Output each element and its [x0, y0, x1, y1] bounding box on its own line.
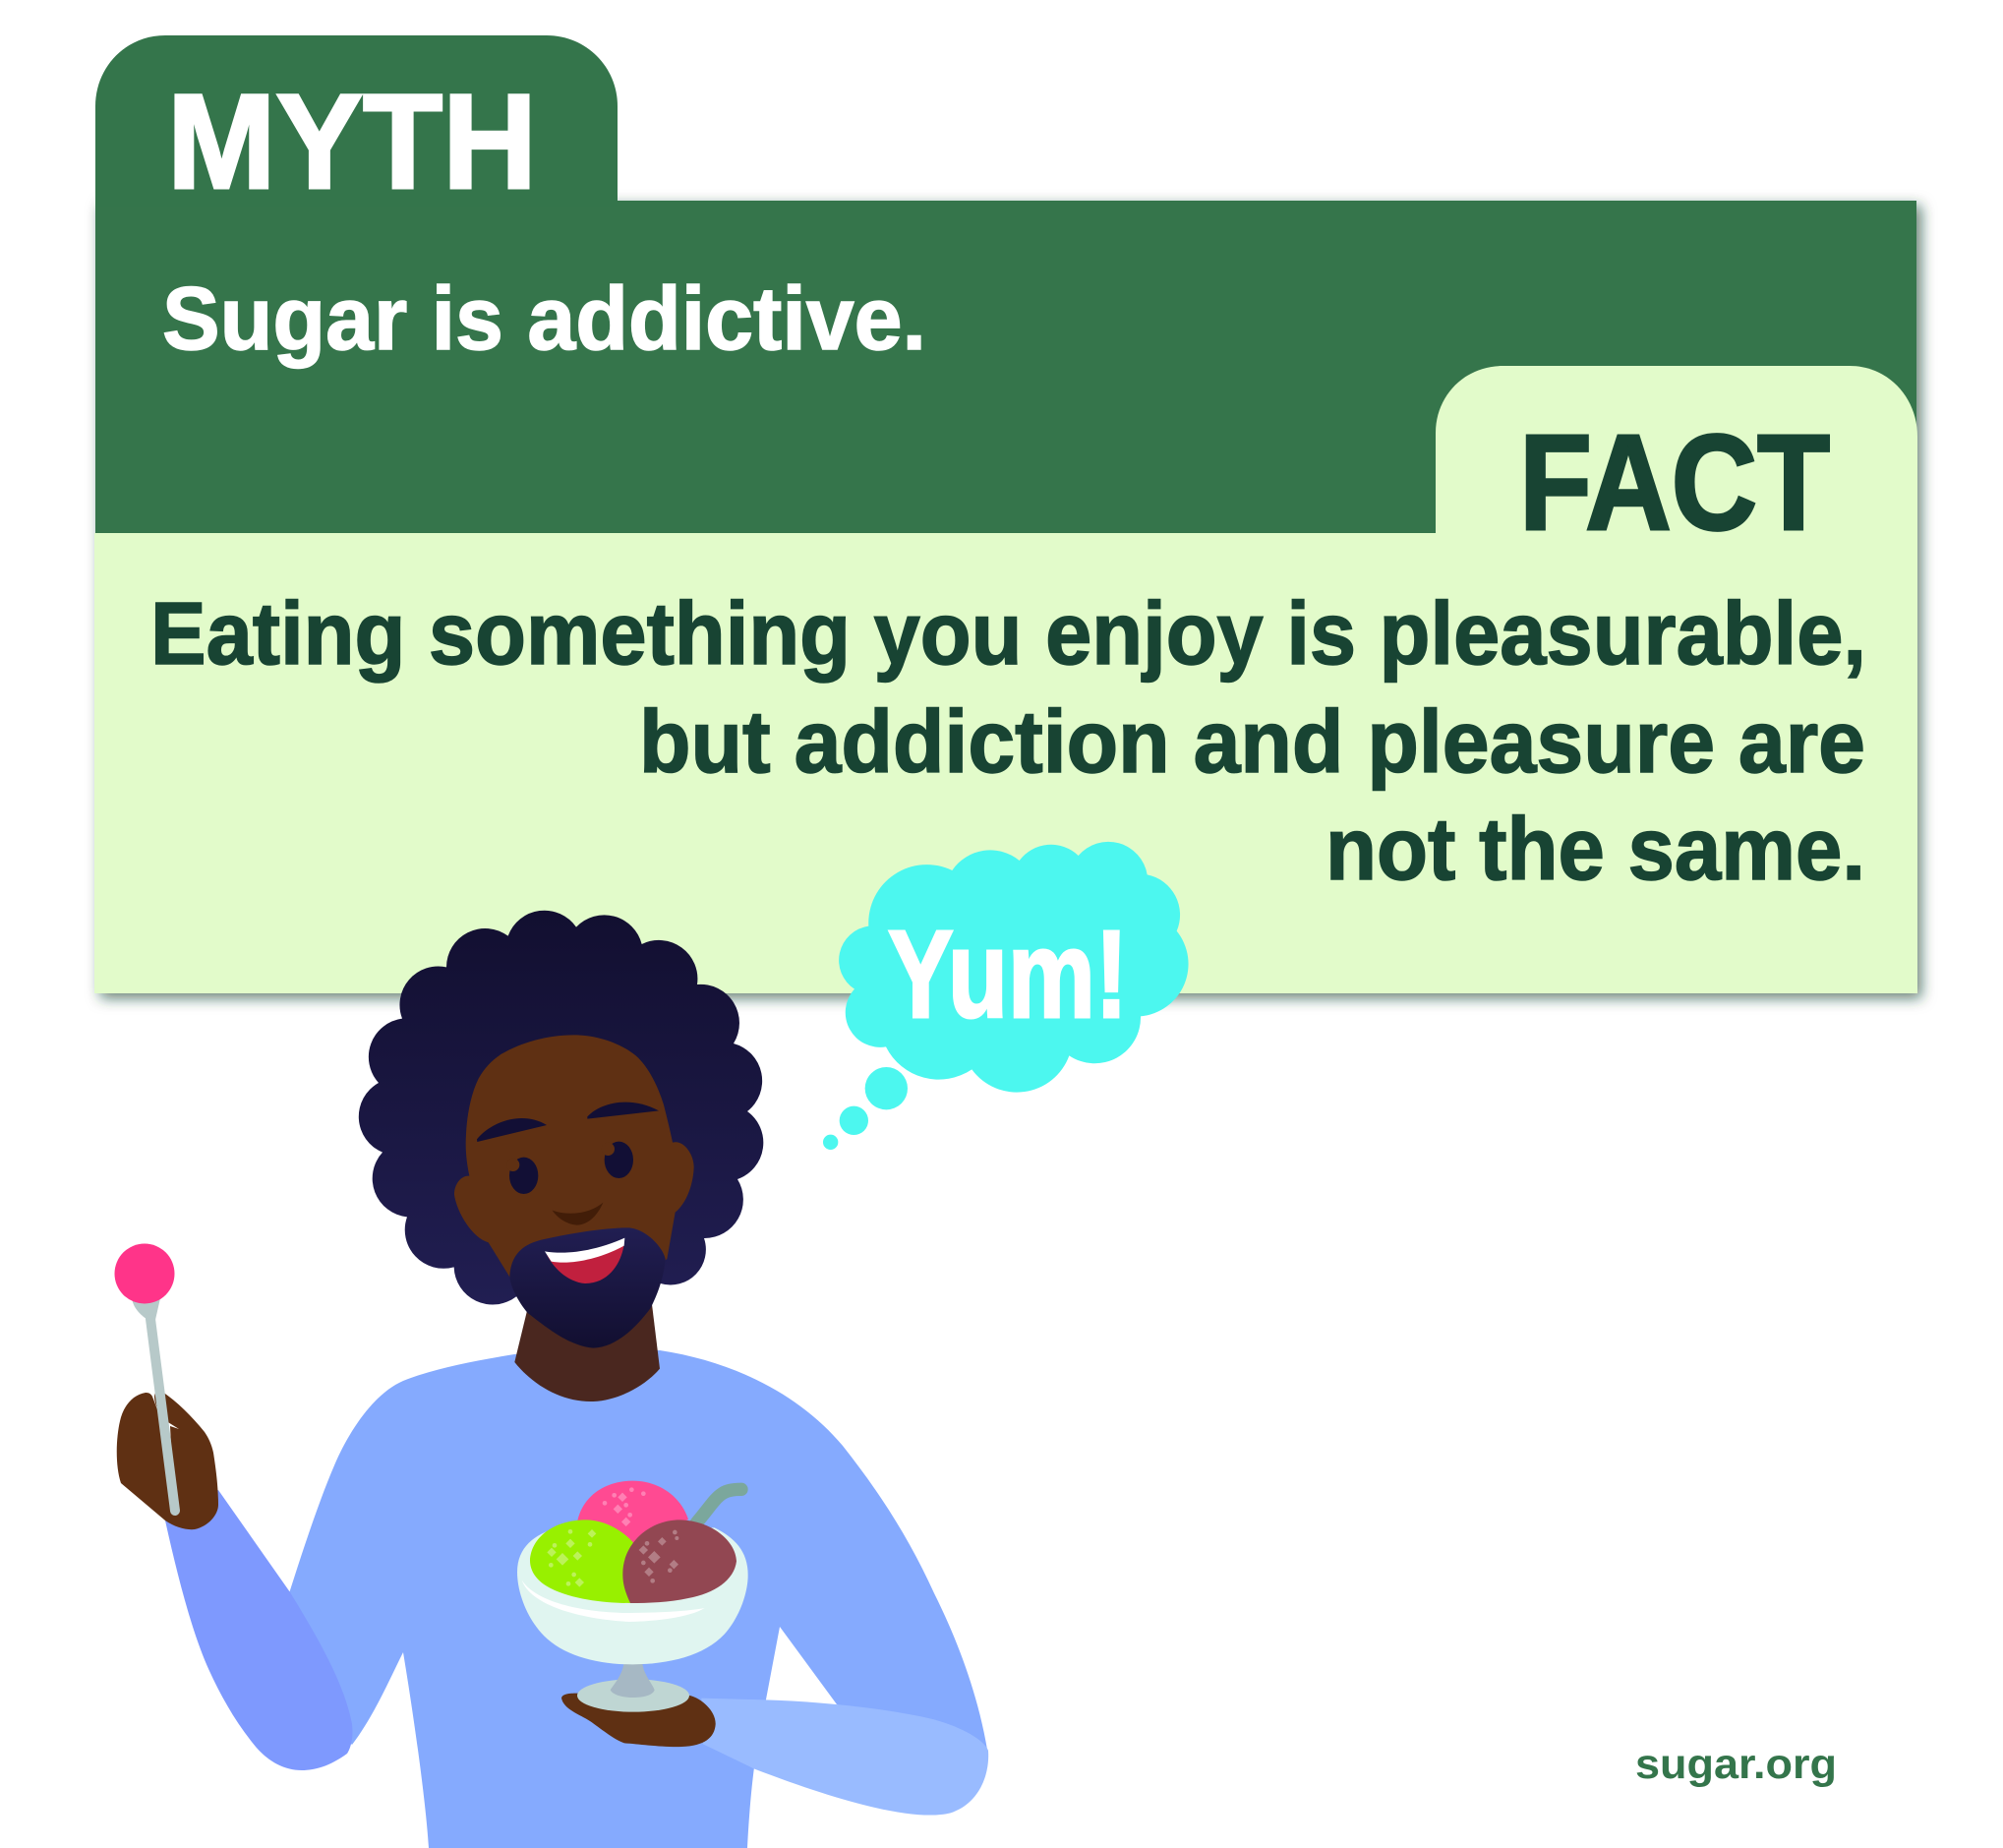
heading: FACT: FACT: [1519, 407, 1830, 559]
text: fact statement: [150, 585, 1866, 899]
character: man eating ice cream: [114, 911, 988, 1848]
lollipop ball: [114, 1243, 175, 1304]
right sleeve and hand: [561, 1694, 988, 1816]
text: fact statement: not the same.: [1326, 801, 1865, 899]
chocolate scoop: [622, 1520, 736, 1603]
website credit: sugar.org: [1635, 1741, 1837, 1788]
mouth: [545, 1238, 624, 1283]
left hand: [117, 1391, 218, 1529]
pink scoop: [577, 1481, 688, 1544]
beard: [509, 1227, 666, 1348]
text: fact statement: Eating something you enjoy is pleasurable,: [150, 585, 1866, 684]
torso: [265, 1350, 988, 1848]
eyes: [506, 1142, 633, 1194]
ice cream bowl: [517, 1481, 748, 1712]
panel: myth and fact card: [94, 35, 1917, 993]
face: [454, 1035, 694, 1348]
left sleeve: [165, 1490, 352, 1770]
bowl foot: [577, 1679, 689, 1712]
lollipop spoon: [114, 1243, 218, 1529]
neck: [514, 1301, 660, 1401]
thought bubble: [823, 842, 1189, 1150]
bowl: [517, 1527, 748, 1664]
green scoop: [530, 1520, 633, 1603]
text: Yum!: Yum!: [888, 905, 1128, 1043]
nose: [553, 1203, 603, 1225]
bowl highlight: [522, 1580, 705, 1622]
heading: MYTH: MYTH: [167, 67, 537, 217]
hair: [359, 911, 763, 1305]
bowl stem: [611, 1664, 655, 1698]
lollipop stick: [150, 1319, 175, 1511]
spoon: [696, 1489, 741, 1522]
panel: fact body: [94, 533, 1917, 993]
text: myth statement: Sugar is addictive.: [162, 269, 926, 369]
panel: myth tab: [95, 35, 618, 207]
eyebrows: [477, 1103, 659, 1142]
panel: fact tab: [1436, 366, 1917, 541]
text: fact statement: but addiction and pleasure are: [639, 693, 1865, 792]
